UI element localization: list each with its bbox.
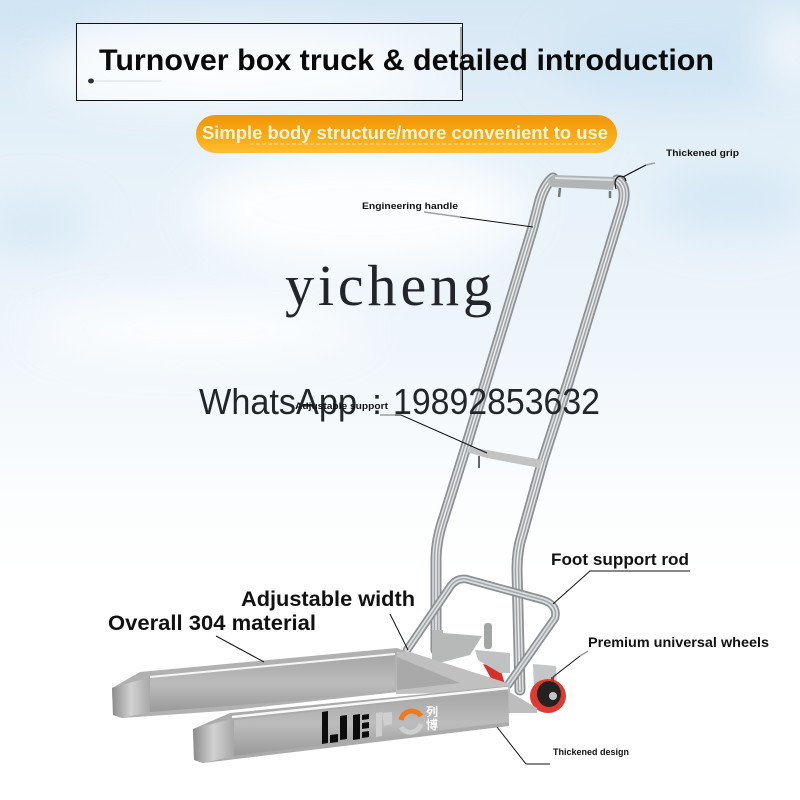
callout: premium universal wheels xyxy=(553,634,769,677)
callout: thickened grip xyxy=(615,148,739,189)
fork end bracket xyxy=(506,690,537,713)
front fork xyxy=(193,686,509,763)
back fork xyxy=(112,648,410,718)
adjustable support crossbar xyxy=(467,447,543,468)
title text: Turnover box truck & detailed introduction xyxy=(99,44,714,77)
title box xyxy=(76,24,714,100)
callout: overall 304 material xyxy=(108,612,316,662)
watermark: WhatsApp number: 19892853632 xyxy=(393,381,600,422)
brand logo LIEBO: 列 xyxy=(426,705,438,719)
watermark: yicheng: yicheng xyxy=(285,253,496,318)
callout: engineering handle xyxy=(362,201,533,227)
fork cross member xyxy=(396,652,510,694)
callout: thickened design xyxy=(497,727,629,764)
thickened grip xyxy=(548,175,615,190)
grip bolts xyxy=(559,188,610,198)
callout: adjustable width xyxy=(241,588,415,650)
brand logo LIEBO xyxy=(322,705,438,744)
rear caster xyxy=(475,623,510,684)
watermark: WhatsApp number: : xyxy=(372,381,382,422)
callout: premium universal wheels: Premium universal wheels xyxy=(588,634,769,650)
foot support rod xyxy=(407,579,556,685)
callout: adjustable support: Adjustable support xyxy=(295,401,389,412)
watermark: WhatsApp number xyxy=(199,381,600,422)
callout: thickened design: Thickened design xyxy=(553,747,629,757)
callout: foot support rod xyxy=(551,550,690,604)
handle frame tubes xyxy=(436,178,624,690)
rear connecting bracket xyxy=(432,630,482,662)
callout: engineering handle: Engineering handle xyxy=(362,201,458,212)
callout: adjustable width: Adjustable width xyxy=(241,588,415,611)
watermark: WhatsApp number: WhatsApp xyxy=(199,381,357,422)
orange subtitle pill: Simple body structure/more convenient to use xyxy=(202,123,608,143)
front caster wheel xyxy=(530,664,566,713)
callout: thickened grip: Thickened grip xyxy=(666,148,739,159)
truck product image xyxy=(112,175,624,763)
brand logo LIEBO: 博 xyxy=(426,717,438,732)
callout: overall 304 material: Overall 304 material xyxy=(108,612,316,635)
orange subtitle pill xyxy=(196,115,617,153)
callout: adjustable support xyxy=(295,401,487,453)
callout: foot support rod: Foot support rod xyxy=(551,550,689,569)
